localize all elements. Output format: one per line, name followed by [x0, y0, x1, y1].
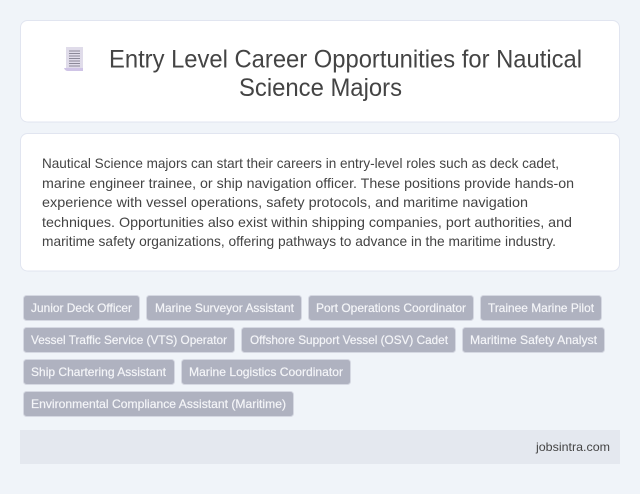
tag — [462, 328, 604, 352]
tag: Vessel Traffic Service (VTS) Operator — [31, 333, 227, 347]
tag — [182, 360, 350, 384]
tag — [146, 296, 302, 320]
tag: Marine Logistics Coordinator — [189, 365, 343, 379]
title — [109, 46, 582, 102]
panel: description — [20, 134, 620, 271]
footer: jobsintra.com — [535, 440, 610, 454]
tag: Marine Surveyor Assistant — [155, 301, 295, 315]
tag — [24, 296, 140, 320]
panel: header — [20, 20, 620, 122]
tag: Port Operations Coordinator — [316, 301, 466, 315]
icon: document scroll — [64, 47, 83, 71]
tag — [24, 360, 174, 384]
description text: maritime safety organizations, offering pathways to advance in the maritime industry. — [42, 233, 556, 249]
tag — [24, 392, 294, 416]
tags — [24, 296, 604, 416]
tag: Junior Deck Officer — [31, 301, 132, 315]
description text — [42, 155, 574, 249]
tag: Offshore Support Vessel (OSV) Cadet — [250, 333, 449, 347]
tag — [480, 296, 602, 320]
description text: Nautical Science majors can start their careers in entry-level roles such as deck cadet, — [42, 155, 559, 171]
tag — [24, 328, 234, 352]
tag — [308, 296, 474, 320]
tag: Environmental Compliance Assistant (Maritime) — [31, 397, 286, 411]
tag: Trainee Marine Pilot — [488, 301, 595, 315]
description text: techniques. Opportunities also exist within shipping companies, port authorities, and — [42, 214, 572, 230]
description text: experience with vessel operations, safety protocols, and maritime navigation — [42, 194, 528, 210]
tag: Maritime Safety Analyst — [470, 333, 598, 347]
footer — [20, 430, 620, 464]
tag: Ship Chartering Assistant — [31, 365, 167, 379]
tag — [242, 328, 456, 352]
title: Entry Level Career Opportunities for Nautical — [109, 46, 582, 74]
description text: marine engineer trainee, or ship navigation officer. These positions provide hands-on — [42, 175, 574, 191]
title: Science Majors — [239, 74, 402, 102]
